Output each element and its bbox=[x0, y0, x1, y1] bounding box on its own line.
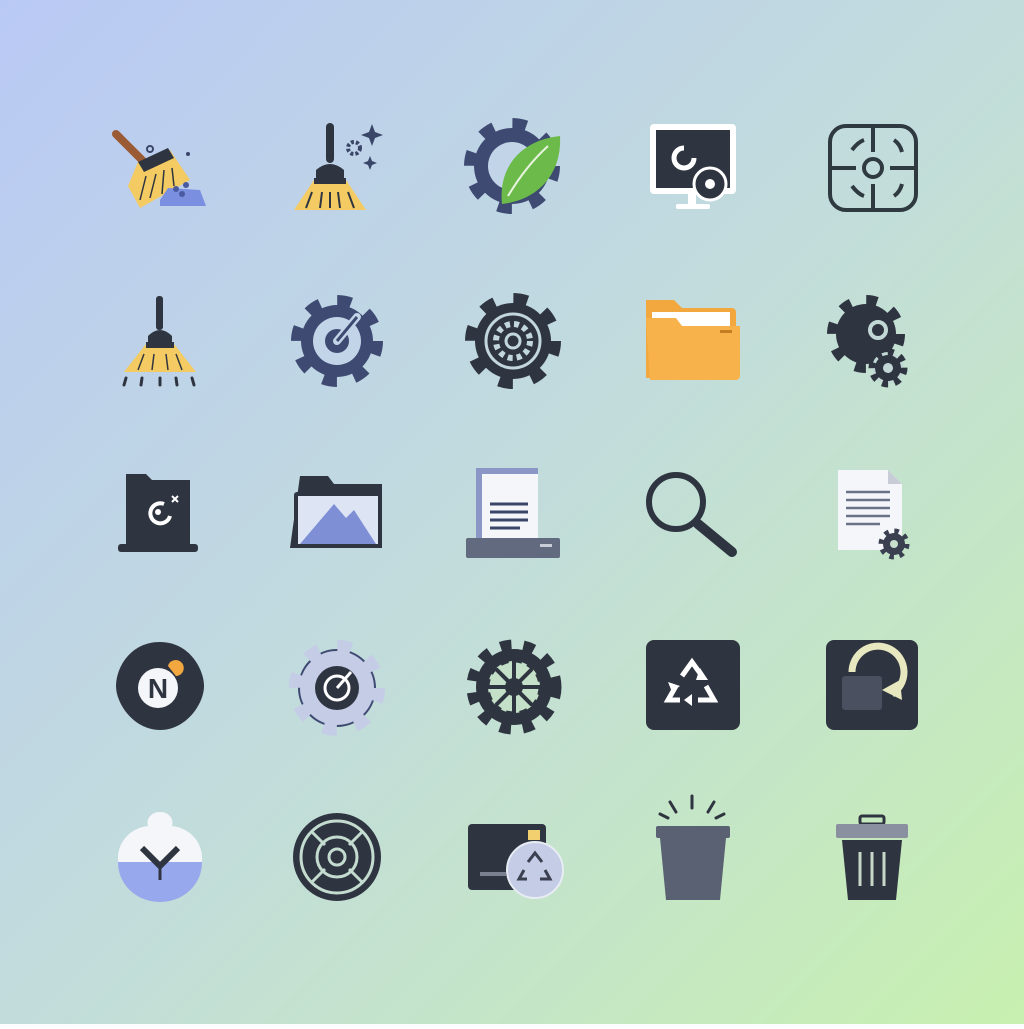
icon: folder with image bbox=[290, 476, 382, 548]
icon: N badge bbox=[116, 642, 204, 730]
icon: dark gear with inner gear bbox=[471, 299, 555, 383]
icon: printer with document bbox=[466, 468, 560, 558]
icon: broom with sparkles bbox=[294, 123, 383, 210]
icon: target square outline bbox=[830, 126, 916, 210]
icon: magnifier bbox=[649, 475, 732, 552]
icon: square with return arrow bbox=[826, 640, 918, 730]
icon: recycle square bbox=[646, 640, 740, 730]
icon: gear with gauge bbox=[297, 301, 377, 381]
icon: monitor with refresh bbox=[650, 124, 736, 209]
icon: gray trash with lines bbox=[656, 796, 730, 900]
icon: two gears bbox=[832, 300, 904, 384]
icon: N badge: N bbox=[148, 673, 168, 704]
icon: circle target bbox=[293, 813, 381, 901]
icon: laptop with folder bbox=[118, 474, 198, 552]
icon: dark trash bbox=[836, 816, 908, 900]
icon: document with gear bbox=[838, 470, 907, 557]
icon: card with recycle bbox=[468, 824, 563, 898]
icon: broom with dust bbox=[116, 134, 206, 208]
icon: light blob with chevron bbox=[118, 812, 202, 902]
icon: broom with drops bbox=[124, 296, 196, 385]
icon: light gear with dark circle bbox=[295, 646, 379, 730]
icon: gear with leaf bbox=[470, 124, 560, 208]
icon: orange folder bbox=[646, 300, 740, 380]
icon: dark gear wheel bbox=[472, 645, 556, 729]
